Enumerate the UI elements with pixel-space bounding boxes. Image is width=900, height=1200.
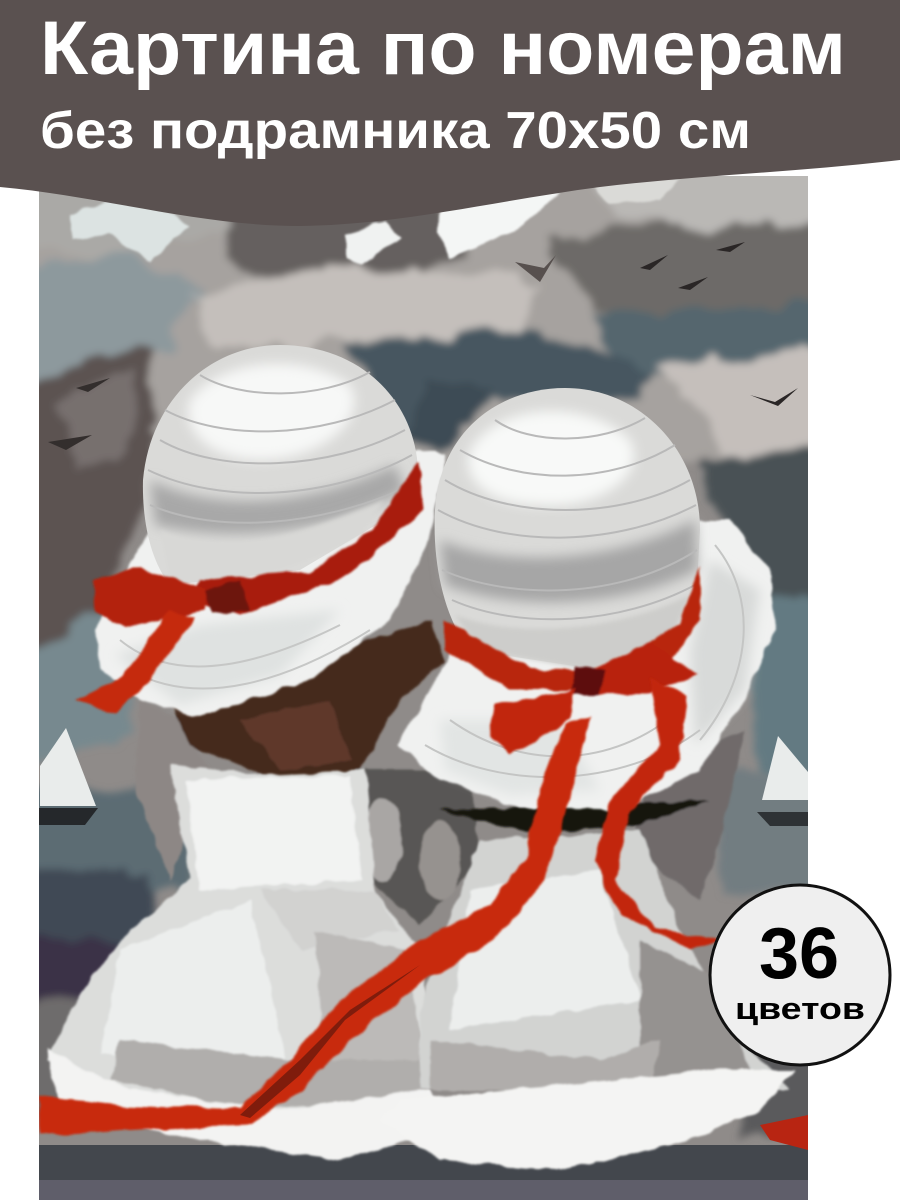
badge: 36 colours: 36 (759, 914, 839, 994)
painting: two girls in white hats by the sea (20, 160, 830, 1200)
left hat brim (95, 450, 445, 717)
right girl: arms and dress (380, 730, 795, 1170)
bench at the bottom (39, 1145, 808, 1200)
badge: 36 colours (710, 885, 890, 1065)
long red ribbon (39, 678, 808, 1150)
right hat crown (435, 388, 700, 670)
right hat (398, 388, 775, 810)
title: Картина по номерам (40, 6, 846, 91)
right hat brim (398, 520, 775, 810)
left hat red ribbon and bow (75, 462, 425, 712)
left hat crown (143, 345, 418, 585)
left girl: hair and arms (135, 620, 480, 925)
left hat (95, 345, 445, 717)
stormy sky (20, 160, 830, 790)
right hat red ribbon and bow (445, 565, 700, 755)
clouds and birds (70, 178, 680, 266)
left girl: white dress (48, 765, 440, 1160)
badge: 36 colours: цветов (735, 991, 865, 1026)
sea and sailboats (20, 728, 830, 1140)
subtitle: без подрамника 70х50 см (40, 102, 751, 160)
header banner (0, 0, 900, 226)
